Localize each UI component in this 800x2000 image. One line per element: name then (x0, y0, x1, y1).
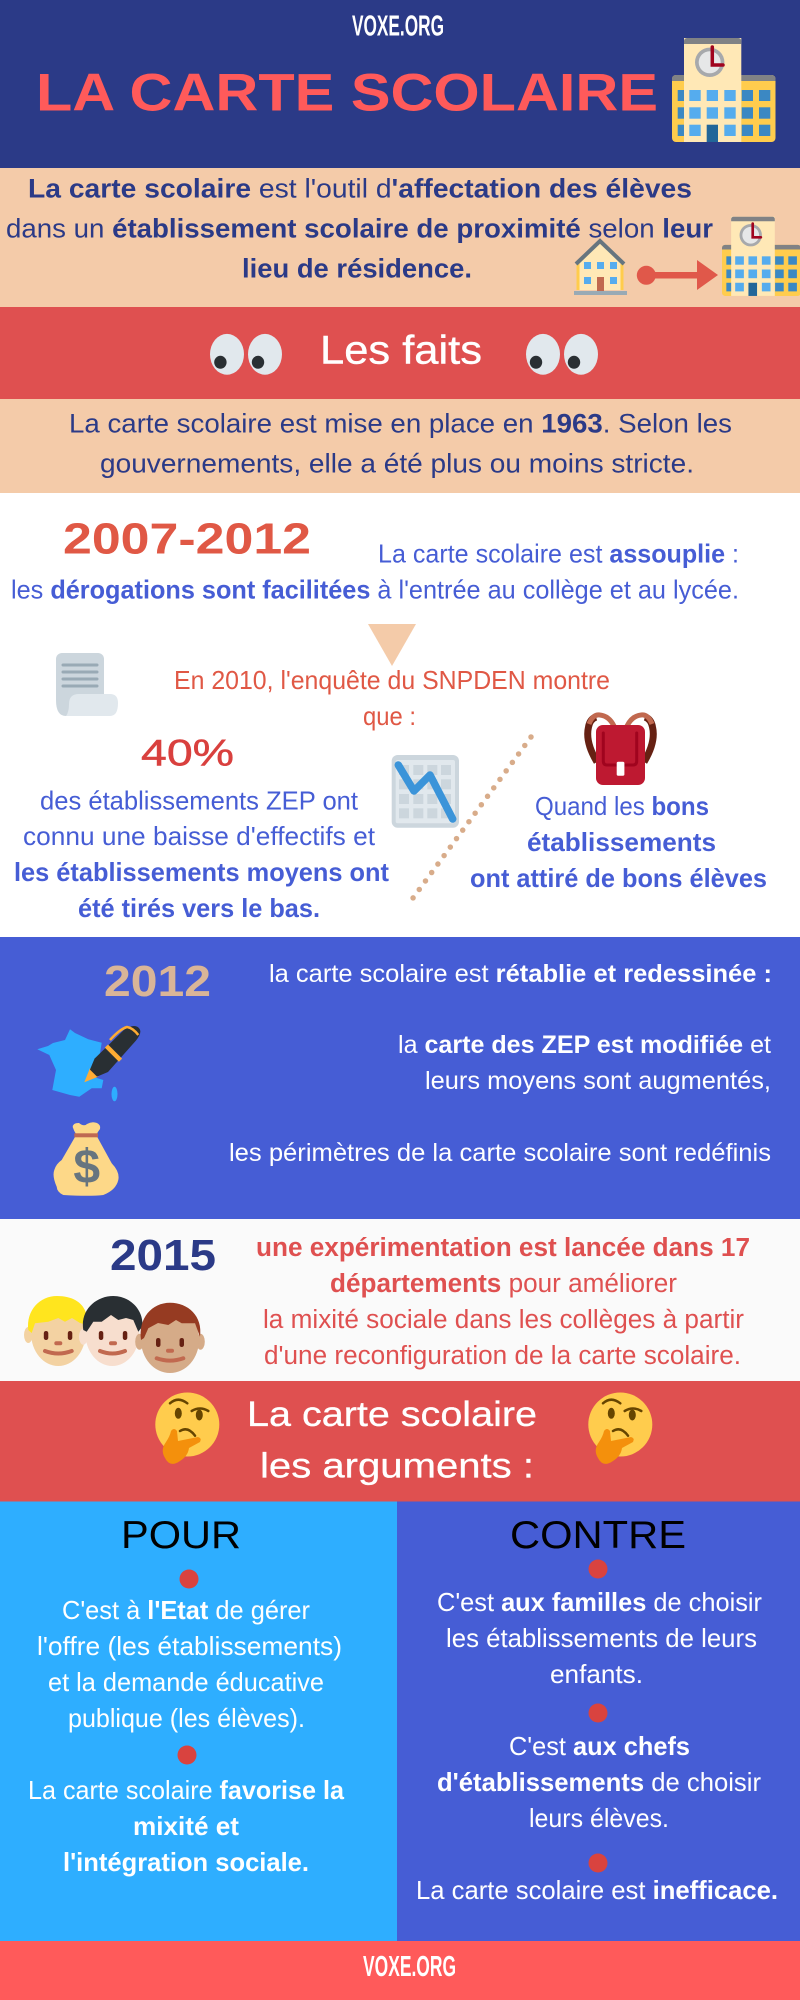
text: ZEP: connu une baisse d'effectifs et (23, 821, 376, 851)
text: 1963: gouvernements, elle a été plus ou moins stricte. (100, 449, 694, 479)
text: perimetres: les périmètres de la carte scolaire sont redéfinis (229, 1139, 771, 1167)
text: ZEP: été tirés vers le bas. (78, 893, 320, 923)
icon: down triangle (368, 624, 416, 666)
panel: footer (0, 1941, 800, 2000)
icon: school (672, 38, 776, 142)
heading: les faits: Les faits (320, 328, 482, 372)
arrow: house to school (637, 260, 718, 290)
text: bons etablissements: Quand les bons (535, 791, 709, 821)
text: role de l'Etat: et la demande éducative (48, 1667, 324, 1697)
panel: arguments banner (0, 1381, 800, 1502)
text: mixite: l'intégration sociale. (63, 1847, 309, 1877)
text: chefs: d'établissements de choisir (437, 1767, 761, 1797)
text: experimentation: départements pour améliorer (330, 1270, 678, 1298)
stat: 40%: 40% (141, 732, 234, 774)
icon: document scroll (56, 653, 118, 716)
face: brown hair (135, 1303, 205, 1373)
text: role de l'Etat: C'est à l'Etat de gérer (62, 1595, 310, 1625)
icon: eyes right (526, 334, 598, 375)
text: chefs (437, 1731, 761, 1833)
icon: three children (24, 1296, 205, 1373)
bullet (588, 1854, 608, 1872)
text: definition: La carte scolaire est l'outil d'affectation des élèves (28, 173, 692, 203)
title: LA CARTE SCOLAIRE (36, 64, 658, 123)
text: enquete SNPDEN: En 2010, l'enquête du SNPDEN montre (174, 665, 610, 695)
brand top: VOXE.ORG (352, 10, 444, 42)
text: bons etablissements: ont attiré de bons élèves (470, 863, 767, 893)
icon: thinking face left (155, 1392, 219, 1464)
text: ZEP (14, 786, 389, 923)
text: mixite: La carte scolaire favorise la (28, 1775, 345, 1805)
text: chefs: leurs élèves. (529, 1803, 669, 1833)
panel: header (0, 0, 800, 168)
text: familles (437, 1587, 762, 1689)
text: familles: C'est aux familles de choisir (437, 1587, 762, 1617)
text: role de l'Etat (37, 1595, 342, 1733)
panel: les faits banner (0, 307, 800, 399)
heading: 2015: 2015 (110, 1231, 216, 1280)
text: role de l'Etat: publique (les élèves). (68, 1703, 305, 1733)
face: dark hair (79, 1296, 142, 1366)
text: experimentation (256, 1234, 750, 1370)
text: enquete SNPDEN (174, 665, 610, 731)
text: 1963: La carte scolaire est mise en place en 1963. Selon les (69, 409, 732, 439)
text: assouplie (11, 539, 739, 605)
text: assouplie: La carte scolaire est assouplie : (378, 539, 739, 569)
text: mixite: mixité et (133, 1811, 239, 1841)
text: experimentation: d'une reconfiguration de la carte scolaire. (264, 1342, 741, 1370)
heading: 2012: 2012 (104, 957, 211, 1006)
text: mixite (28, 1775, 345, 1877)
icon: money bag: $ (73, 1141, 100, 1194)
heading: arguments: La carte scolaire (247, 1395, 537, 1434)
text: enquete SNPDEN: que : (363, 701, 416, 731)
text: definition (6, 173, 713, 283)
text: ZEP modifiee: leurs moyens sont augmentés, (425, 1067, 771, 1095)
text: definition: dans un établissement scolaire de proximité selon leur (6, 214, 713, 244)
icon: pen (77, 1021, 146, 1089)
panel: 2012 (0, 937, 800, 1219)
icon: small school (722, 217, 800, 296)
text: retablie: la carte scolaire est rétablie et redessinée : (269, 960, 772, 988)
icon: backpack (588, 715, 653, 785)
text: chefs: C'est aux chefs (509, 1731, 690, 1761)
text: inefficace: La carte scolaire est inefficace. (416, 1875, 778, 1905)
icon: eyes left (210, 334, 282, 375)
heading: 2007-2012: 2007-2012 (63, 514, 311, 563)
icon: money bag (54, 1122, 119, 1196)
text: bons etablissements (470, 791, 767, 893)
face: blond (24, 1296, 86, 1366)
heading: arguments (247, 1395, 537, 1486)
text: role de l'Etat: l'offre (les établissements) (37, 1631, 342, 1661)
heading: pour: POUR (121, 1514, 241, 1557)
text: ZEP modifiee: la carte des ZEP est modifiée et (398, 1031, 771, 1059)
panel: definition (0, 168, 800, 307)
panel: pour (0, 1502, 397, 1942)
icon: map of France (37, 1029, 117, 1101)
text: ZEP modifiee (398, 1031, 771, 1095)
text: familles: les établissements de leurs (446, 1623, 757, 1653)
text: bons etablissements: établissements (527, 827, 716, 857)
heading: arguments: les arguments : (260, 1446, 534, 1486)
text: assouplie: les dérogations sont facilitées à l'entrée au collège et au lycée. (11, 575, 739, 605)
panel: 2007-2012 (0, 493, 800, 937)
brand footer: VOXE.ORG (363, 1951, 456, 1983)
text: familles: enfants. (550, 1659, 643, 1689)
text: experimentation: la mixité sociale dans les collèges à partir (263, 1306, 745, 1334)
icon: falling chart (392, 755, 459, 828)
dotted separator (413, 737, 531, 898)
bullet (588, 1704, 608, 1722)
panel: intro facts (0, 399, 800, 493)
bullet (180, 1570, 198, 1588)
heading: contre: CONTRE (510, 1514, 686, 1557)
bullet (178, 1746, 196, 1764)
text: ZEP: des établissements ZEP ont (40, 786, 359, 816)
panel: contre (397, 1502, 800, 1942)
bullet (588, 1560, 608, 1578)
text: 1963 (69, 409, 732, 479)
text: ZEP: les établissements moyens ont (14, 857, 389, 887)
icon: house (574, 241, 627, 295)
text: definition: lieu de résidence. (242, 253, 472, 283)
text: experimentation: une expérimentation est lancée dans 17 (256, 1234, 750, 1262)
panel: 2015 (0, 1219, 800, 1381)
icon: thinking face right (588, 1392, 652, 1464)
